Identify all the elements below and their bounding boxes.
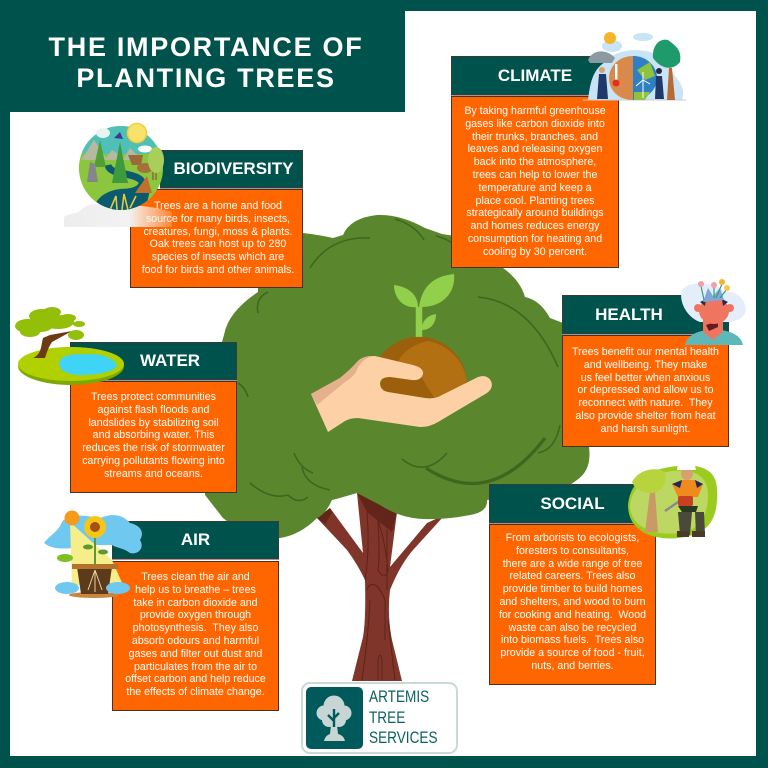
heading: social: SOCIAL <box>540 494 605 512</box>
heading: air: AIR <box>181 530 210 549</box>
title: THE IMPORTANCE OF <box>49 32 363 62</box>
text: health: us feel better when anxious <box>581 372 710 384</box>
logo mark <box>306 687 363 749</box>
text: social: provide a source of food - fruit, <box>500 647 645 659</box>
heading: biodiversity: BIODIVERSITY <box>174 159 293 178</box>
icon: social arborist <box>628 466 718 538</box>
text: biodiversity: creatures, fungi, moss & plants. <box>143 226 293 238</box>
text: climate: leaves and releasing oxygen <box>468 143 602 155</box>
text: social: From arborists to ecologists, <box>506 532 639 544</box>
text: climate: consumption for heating and <box>468 233 602 245</box>
text: air: the effects of climate change. <box>126 686 265 698</box>
text: air: provide oxygen through <box>140 609 251 621</box>
text: biodiversity <box>130 189 303 288</box>
text: health: also provide shelter from heat <box>575 410 716 422</box>
text: water: landslides by stabilizing soil <box>88 417 219 429</box>
text: air: Trees clean the air and <box>141 571 250 583</box>
text: air: photosynthesis. They also <box>133 622 258 634</box>
text: climate: and homes reduces energy <box>471 220 599 232</box>
heading: health: HEALTH <box>595 304 663 324</box>
text: climate: trees can help to lower the <box>473 169 597 181</box>
text: climate: strategically around buildings <box>466 207 604 219</box>
heading: water <box>70 342 237 380</box>
text: climate <box>451 96 619 268</box>
text: climate: gases like carbon dioxide into <box>465 118 605 130</box>
text: biodiversity: source for many birds, insects, <box>146 213 290 225</box>
text: biodiversity: Trees are a home and food <box>154 200 282 212</box>
heading: social <box>489 484 656 523</box>
text: social: waste can also be recycled <box>509 622 636 634</box>
text: water: streams and oceans. <box>104 468 203 480</box>
text: climate: By taking harmful greenhouse <box>464 105 606 117</box>
text: biodiversity: species of insects which are <box>152 251 284 263</box>
logo card <box>301 682 458 754</box>
text: social: provide timber to build homes <box>503 583 642 595</box>
text: social <box>489 524 656 685</box>
text: climate: back into the atmosphere, <box>474 156 596 168</box>
text: air: particulates from the air to <box>134 661 257 673</box>
text: water: carrying pollutants flowing into <box>82 455 225 467</box>
heading: air <box>112 521 279 559</box>
icon: hand holding seedling <box>311 274 492 432</box>
text: climate: place cool. Planting trees <box>476 195 594 207</box>
logo text: ARTEMIS <box>369 687 429 706</box>
panel: health <box>562 295 729 447</box>
tree trunk <box>317 493 453 681</box>
panel: water <box>70 342 237 493</box>
canopy shading arcs <box>238 219 560 501</box>
text: air: gases and filter out dust and <box>129 648 262 660</box>
text: biodiversity: food for birds and other animals. <box>142 264 294 276</box>
text: social: into biomass fuels. Trees also <box>501 634 644 646</box>
text: biodiversity: Oak trees can host up to 280 <box>150 238 286 250</box>
icon: climate globe <box>583 32 686 100</box>
text: social: nuts, and berries. <box>531 660 614 672</box>
text: air <box>112 561 279 711</box>
panel: climate <box>451 56 619 268</box>
text: air: offset carbon and help reduce <box>125 673 266 685</box>
text: water: against flash floods and <box>98 404 209 416</box>
logo text: TREE <box>369 708 405 726</box>
heading: climate: CLIMATE <box>498 66 572 84</box>
icon: air sunflower <box>44 510 142 598</box>
tree canopy <box>205 215 600 538</box>
text: air: take in carbon dioxide and <box>133 597 258 609</box>
text: social: related careers. Trees also <box>510 570 635 582</box>
text: health: and wellbeing. They make <box>584 359 707 371</box>
text: health: Trees benefit our mental health <box>572 346 719 358</box>
icon: water pond and tree <box>15 307 124 385</box>
text: air: help us to breathe – trees <box>135 584 256 596</box>
logo text <box>369 687 438 747</box>
icon: biodiversity landscape <box>64 122 172 227</box>
panel: social <box>489 484 656 685</box>
text: climate: temperature and keep a <box>478 182 591 194</box>
text: social: there are a wide range of tree <box>503 558 642 570</box>
text: climate: cooling by 30 percent. <box>483 246 587 258</box>
logo text: SERVICES <box>369 728 438 747</box>
heading: biodiversity <box>160 150 303 188</box>
text: water: Trees protect communities <box>91 391 216 403</box>
icon: health person with flowers <box>681 279 746 345</box>
text: health: and harsh sunlight. <box>601 423 690 435</box>
text: health <box>562 335 729 447</box>
text: social: foresters to consultants, <box>516 545 629 557</box>
text: social: and shelters, and wood to burn <box>499 596 646 608</box>
text: social: for cooking and heating. Wood <box>499 609 646 621</box>
heading: water: WATER <box>140 351 200 370</box>
title block <box>0 0 405 112</box>
title <box>48 32 363 93</box>
text: water: and absorbing water. This <box>93 429 214 441</box>
heading: health <box>562 295 729 334</box>
panel: air <box>112 521 279 711</box>
panel: biodiversity <box>130 150 303 288</box>
title: PLANTING TREES <box>76 63 336 93</box>
text: climate: their trunks, branches, and <box>472 131 598 143</box>
text: health: reconnect with nature. They <box>578 397 713 409</box>
text: air: absorb odours and harmful <box>132 635 259 647</box>
heading: climate <box>451 56 619 95</box>
text: health: or depressed and allow us to <box>577 384 714 396</box>
text: water <box>70 381 237 493</box>
text: water: reduces the risk of stormwater <box>82 442 225 454</box>
